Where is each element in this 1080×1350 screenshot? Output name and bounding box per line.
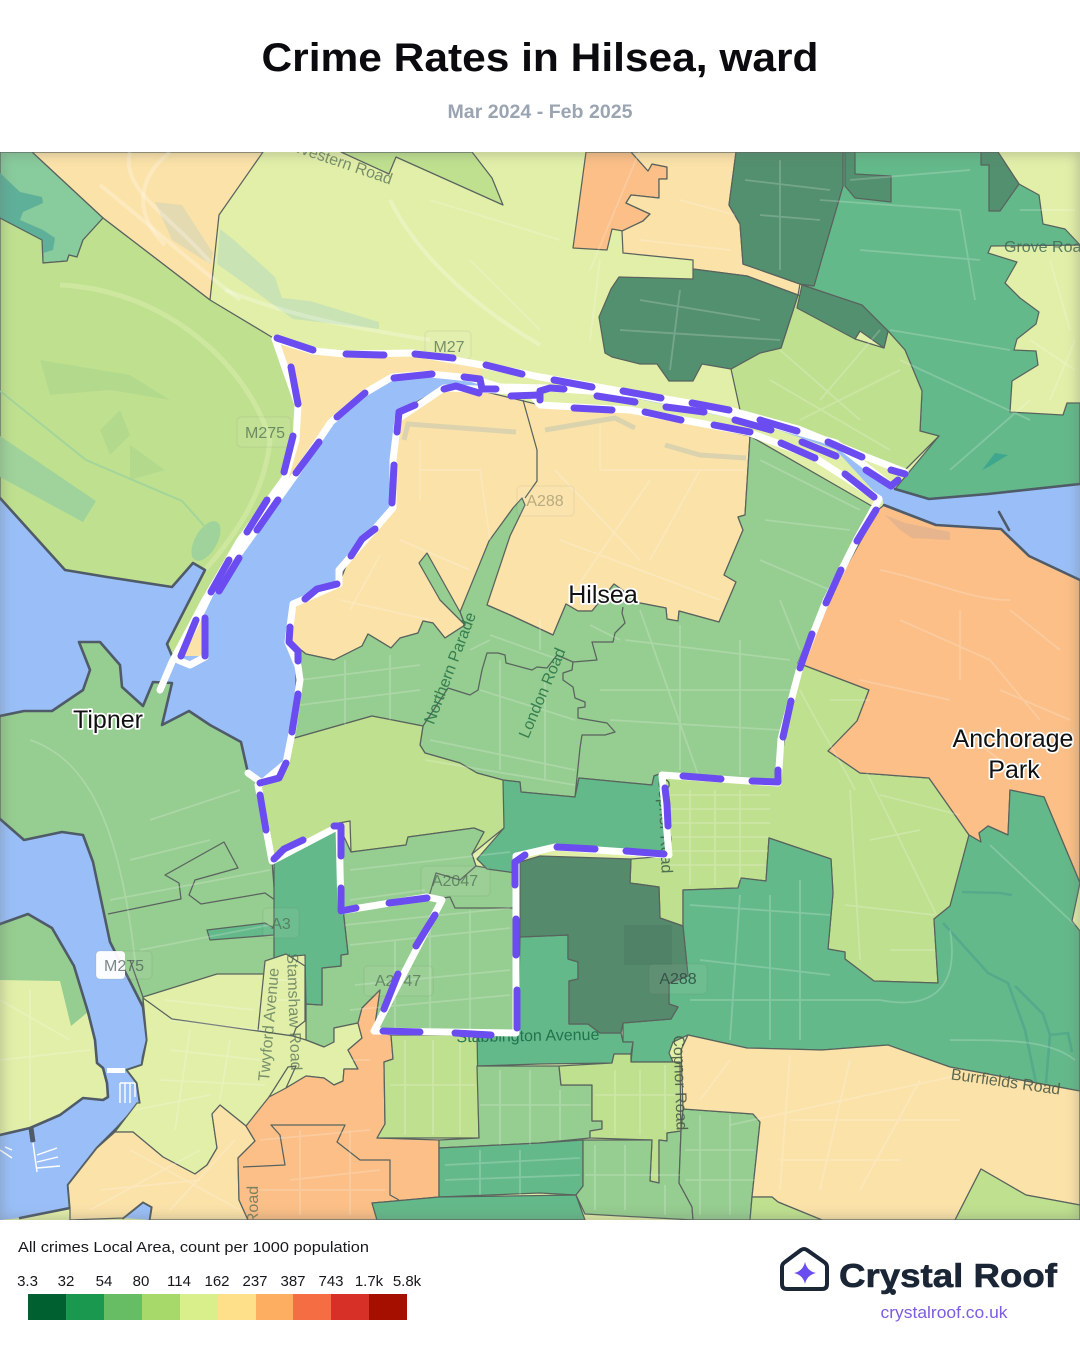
south central inner line bbox=[428, 866, 516, 908]
road labels: Twyford Avenue bbox=[256, 967, 283, 1082]
coast spit bbox=[999, 512, 1009, 530]
road labels: Copnor Road bbox=[669, 1035, 690, 1131]
area: west parkland bbox=[0, 218, 298, 656]
coast Anchorage bbox=[884, 505, 1080, 580]
area: south-west peach bbox=[68, 1105, 255, 1220]
road labels: Northern Parade bbox=[422, 610, 480, 727]
area: north-west teal corner bbox=[0, 152, 103, 263]
place labels bbox=[73, 581, 1073, 784]
road labels: M275 bbox=[104, 958, 144, 975]
ward boundary bbox=[160, 338, 905, 1035]
area: south central green bbox=[306, 826, 518, 1047]
area: southern light bbox=[115, 998, 362, 1174]
area: green block south bbox=[439, 1066, 602, 1148]
legend values: 1.7k bbox=[355, 1273, 384, 1290]
pier block bbox=[31, 1128, 33, 1142]
area: orange patch bbox=[885, 515, 950, 540]
logo: Crystal Roof bbox=[782, 1249, 1058, 1322]
area: sliver bbox=[181, 618, 205, 656]
subtitle: date range: Mar 2024 - Feb 2025 bbox=[448, 102, 633, 123]
area: north orange bbox=[573, 152, 667, 250]
area: north peach bbox=[622, 152, 800, 295]
hilsea inner line bbox=[523, 400, 537, 498]
road labels bbox=[104, 139, 1080, 1224]
north-west road curves bbox=[100, 152, 540, 345]
legend values: 54 bbox=[96, 1273, 112, 1290]
place labels: Hilsea bbox=[568, 581, 638, 609]
area: Hilsea peach bbox=[289, 388, 750, 660]
central inner lines bbox=[423, 607, 625, 797]
road labels: M27 bbox=[433, 339, 465, 356]
area: lime block south centre bbox=[559, 1054, 681, 1183]
area: Anchorage Park orange bbox=[798, 505, 1080, 883]
map edge shading bbox=[0, 152, 1080, 1220]
road labels: Stamshaw Road bbox=[283, 953, 304, 1071]
area: teal block south bbox=[439, 1140, 583, 1197]
water: harbour and lagoon bbox=[0, 374, 1080, 1220]
orange inner line bbox=[243, 1125, 399, 1200]
road labels: Burrfields Road bbox=[950, 1066, 1061, 1099]
road labels: A2047 bbox=[375, 973, 421, 990]
area: teal lower bbox=[372, 1195, 585, 1220]
area: north-west peach bbox=[32, 152, 263, 300]
legend values: 32 bbox=[58, 1273, 74, 1290]
coastal line bbox=[0, 498, 205, 656]
area: Tipner green bbox=[0, 642, 275, 1007]
area: central green bbox=[291, 436, 878, 797]
area: east lime bbox=[630, 663, 969, 983]
Tipner inner lines bbox=[108, 842, 275, 997]
road labels: M275 bbox=[245, 425, 285, 442]
area: Stabbington teal bbox=[477, 935, 633, 1066]
wordmark: Crystal Roof bbox=[839, 1257, 1058, 1294]
area: green block south-east bbox=[576, 1131, 693, 1220]
legend values bbox=[17, 1273, 422, 1290]
road network texture bbox=[0, 150, 1075, 1215]
coast west bbox=[0, 819, 147, 1218]
road labels: A3 bbox=[271, 916, 291, 933]
area: small west green bbox=[0, 914, 88, 1026]
area: east teal large bbox=[623, 790, 1080, 1091]
legend values: 3.3 bbox=[17, 1273, 38, 1290]
dark dotted patch bbox=[624, 925, 672, 965]
area: centre teal block bbox=[477, 773, 667, 873]
area: south-east peach bbox=[681, 1035, 1080, 1220]
road labels: London Road bbox=[516, 646, 569, 741]
road labels: A288 bbox=[526, 493, 564, 510]
road labels: A288 bbox=[659, 971, 697, 988]
coast north-east bbox=[895, 484, 1080, 499]
area: west park strip bbox=[0, 436, 227, 566]
coast south inlet bbox=[123, 1202, 152, 1220]
area: south orange bbox=[238, 990, 439, 1220]
road labels: Copnor Road bbox=[654, 778, 675, 874]
legend colour scale bbox=[28, 1294, 407, 1320]
park ring road and canal bbox=[0, 285, 270, 570]
place labels: Park bbox=[988, 756, 1040, 784]
coast Tipner bbox=[0, 642, 248, 773]
area: east teal pool bbox=[982, 453, 1008, 470]
area: strip tail bbox=[419, 553, 465, 625]
area: north-east lime bbox=[731, 295, 939, 470]
website: crystalroof.co.uk bbox=[880, 1304, 1008, 1322]
legend values: 237 bbox=[242, 1273, 268, 1290]
area: grey patch bbox=[155, 202, 213, 264]
area: west park patches bbox=[40, 360, 170, 480]
place labels: Anchorage bbox=[953, 725, 1073, 753]
teal strip bbox=[207, 923, 274, 940]
stream lines bbox=[943, 892, 1072, 1083]
title: Crime Rates in Hilsea, ward bbox=[262, 36, 818, 80]
legend values: 114 bbox=[167, 1273, 191, 1290]
coast small west bbox=[0, 914, 108, 1135]
hilsea grey canal bbox=[404, 418, 746, 458]
legend values: 80 bbox=[133, 1273, 149, 1290]
area: darkest block bbox=[520, 856, 688, 1033]
area: north-east teal bbox=[800, 152, 1080, 499]
area: A3 teal block bbox=[274, 828, 348, 1005]
icon: house with star bbox=[782, 1249, 827, 1289]
ward boundary white base bbox=[160, 339, 905, 1033]
road labels: Stabbington Avenue bbox=[456, 1027, 600, 1046]
area: lime park south of lagoon bbox=[257, 716, 508, 859]
legend title: All crimes Local Area, count per 1000 population bbox=[18, 1239, 369, 1256]
legend values: 162 bbox=[204, 1273, 230, 1290]
wordmark key ring bbox=[890, 1289, 896, 1295]
road label shields bbox=[96, 331, 707, 996]
area: green block Copnor bbox=[679, 1109, 760, 1220]
ward boundary purple dashes bbox=[181, 338, 905, 1035]
area: north-east dark blocks bbox=[599, 152, 1019, 381]
piers and bridge bbox=[0, 1070, 135, 1172]
legend values: 5.8k bbox=[393, 1273, 422, 1290]
area: north marsh feature bbox=[217, 229, 379, 329]
road labels: Road bbox=[245, 1186, 262, 1224]
area: south-east lime bbox=[955, 1169, 1080, 1220]
road labels: A2047 bbox=[432, 873, 478, 890]
area: bottom green bbox=[750, 1197, 822, 1220]
area: Stamshaw light tongue bbox=[258, 954, 305, 1036]
legend values: 387 bbox=[280, 1273, 306, 1290]
legend bbox=[17, 1239, 422, 1320]
legend values: 743 bbox=[318, 1273, 344, 1290]
road labels: Western Road bbox=[292, 139, 394, 188]
place labels: Tipner bbox=[73, 706, 143, 734]
area: teal patch bbox=[0, 173, 55, 253]
area: lime block south bbox=[377, 1035, 479, 1138]
area: triangle by motorway bbox=[275, 339, 482, 491]
area: north small green bbox=[341, 152, 503, 205]
